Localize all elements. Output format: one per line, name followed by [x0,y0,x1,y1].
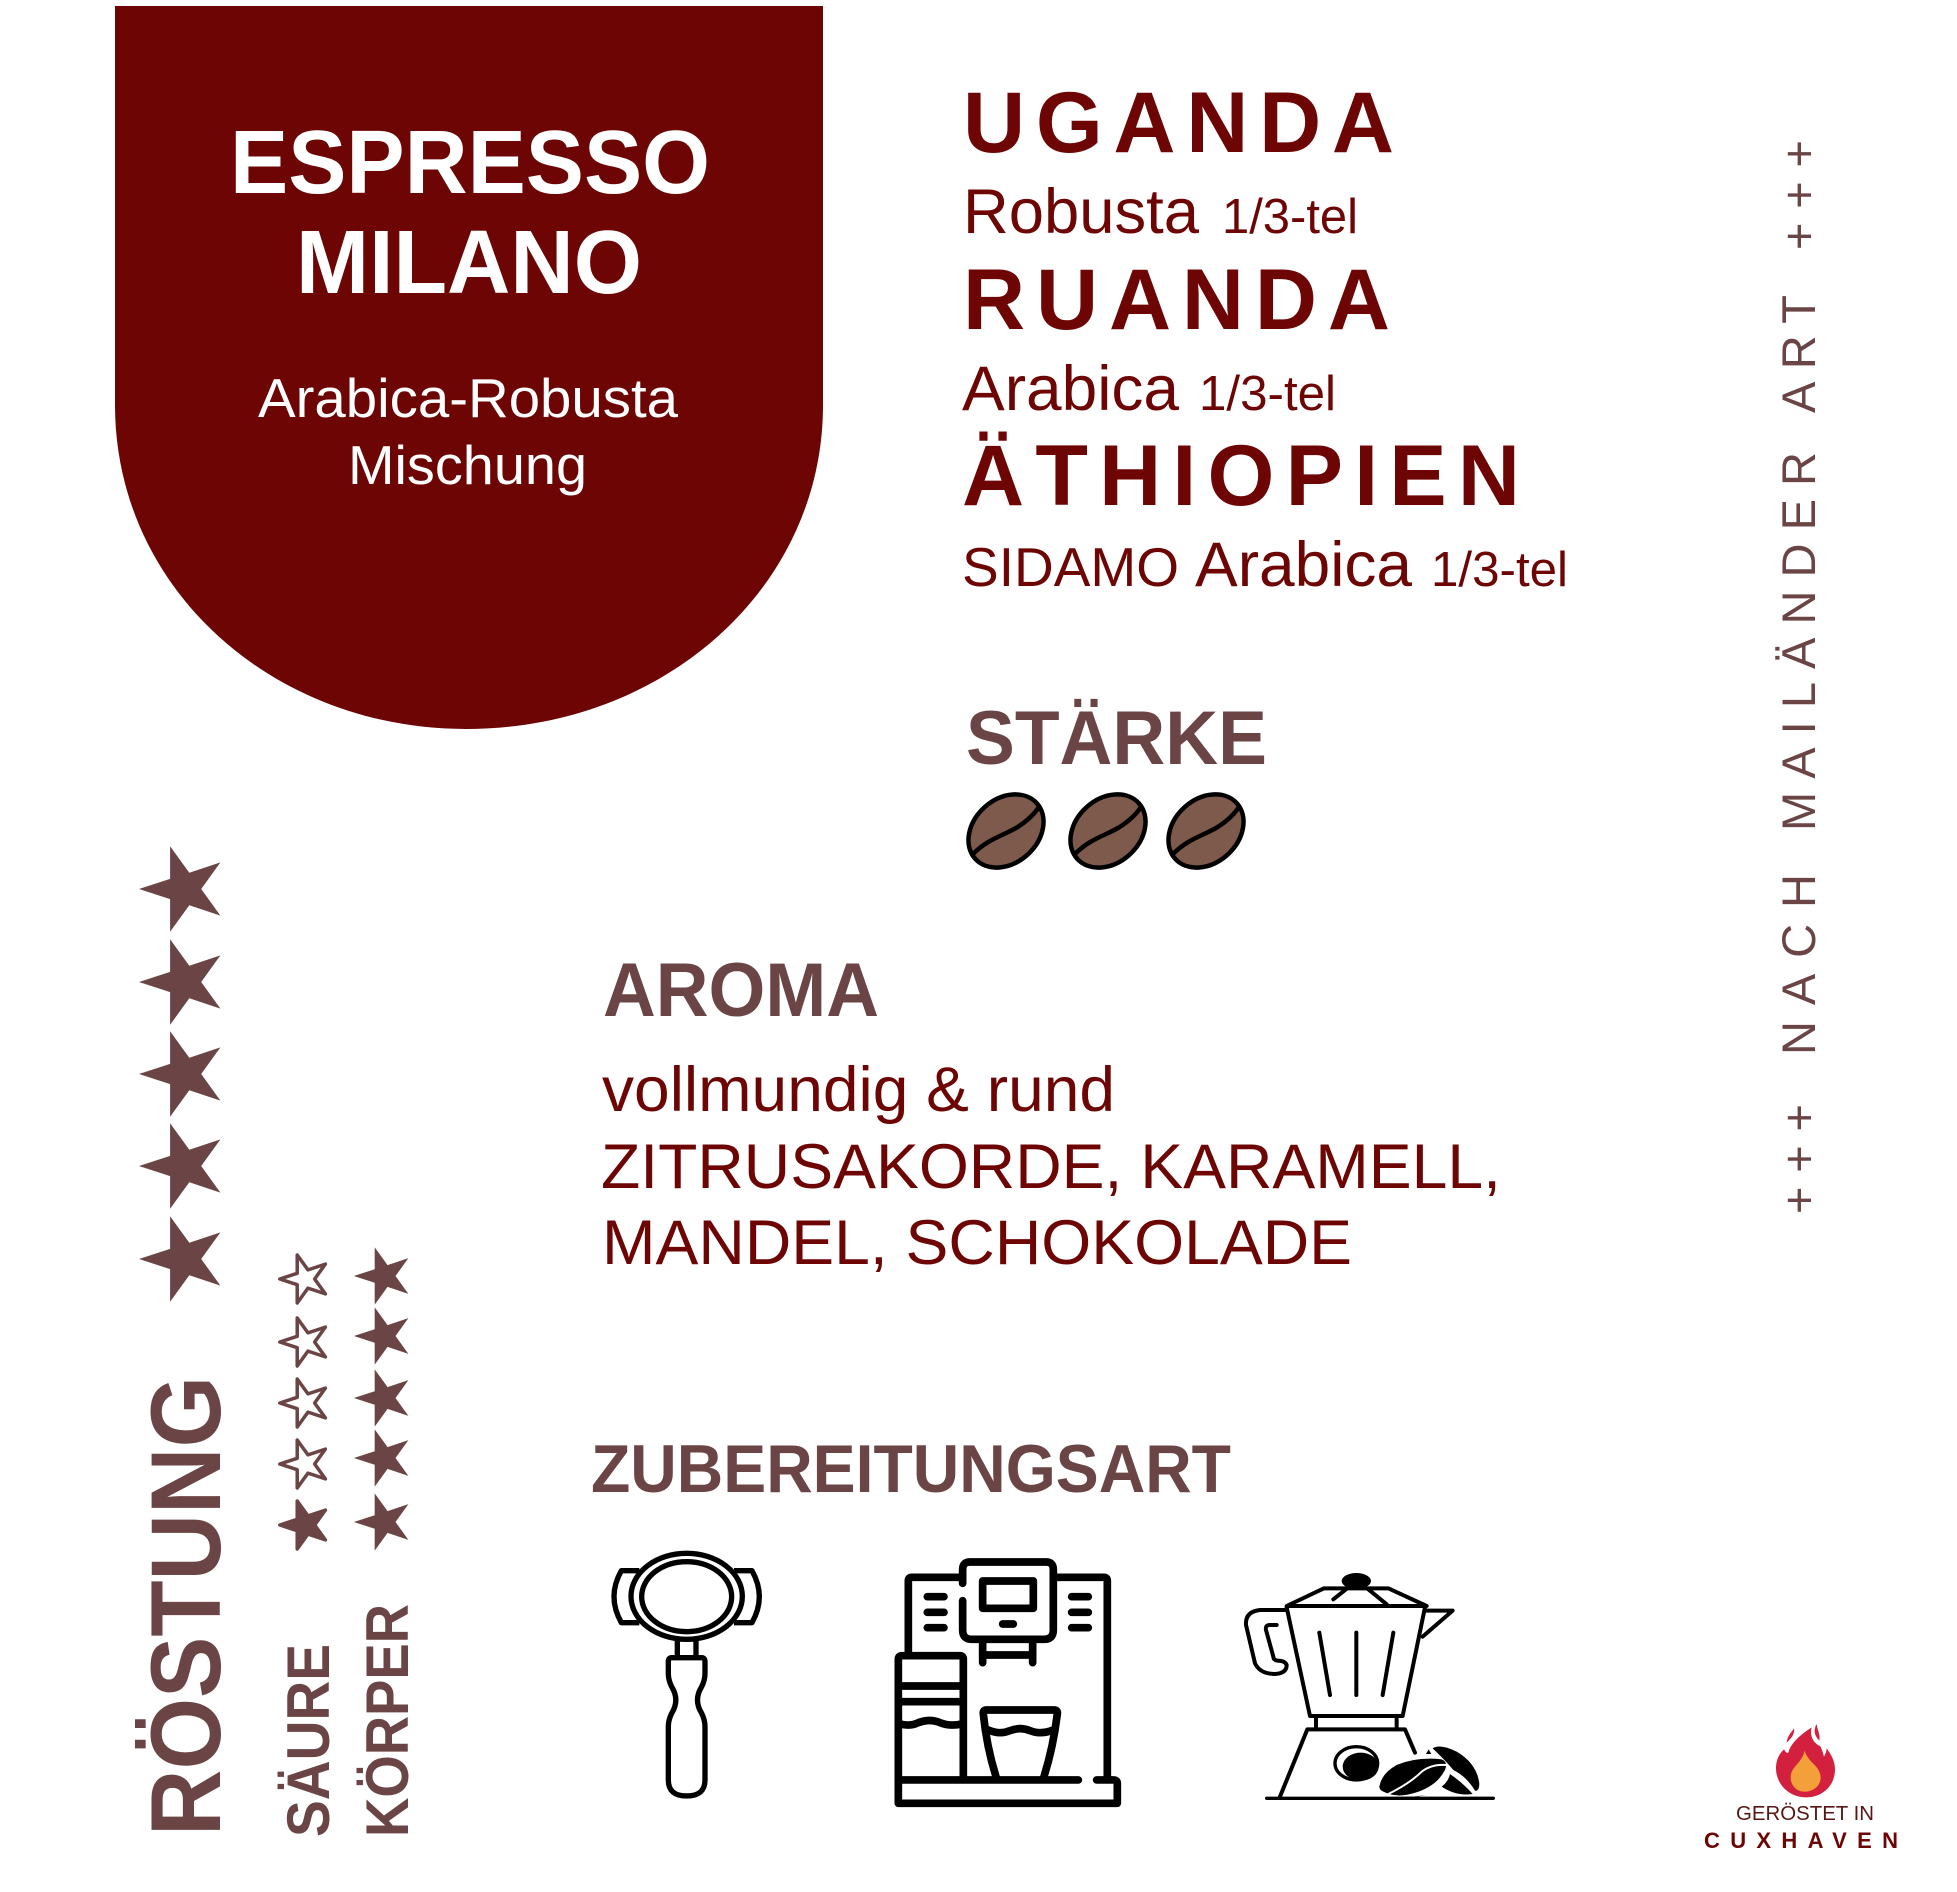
moka knob [1342,1573,1371,1589]
bean 1 [954,779,1058,883]
subtitle: Arabica-Robusta: Arabica-Robusta [258,367,678,429]
icon: flame logo [1776,1724,1835,1797]
origin: Uganda: UGANDA [963,75,1394,171]
side slogan: +++ [1772,140,1825,250]
origin detail: Arabica: Arabica [1195,530,1413,600]
rating: Röstung stars [139,846,220,1302]
origin detail: Arabica: Arabica [962,354,1180,424]
origin detail: Sidamo: SIDAMO [962,536,1179,598]
aroma line 2: ZITRUSAKORDE, KARAMELL, [601,1132,1501,1202]
icons: three coffee beans [954,779,1258,883]
rating: Säure stars [280,1255,325,1549]
icon: portafilter [614,1553,759,1796]
aroma line 1: vollmundig & rund [602,1055,1115,1125]
share: Äthiopien: 1/3-tel [1431,543,1568,597]
rating: Körper stars [354,1247,408,1551]
origin: Äthiopien: ÄTHIOPIEN [962,428,1520,524]
panel: product title shield [115,6,823,729]
side slogan [1772,140,1825,1214]
side slogan: NACH [1772,874,1825,1055]
label: Säure: SÄURE [275,1644,342,1837]
bean 2 [1056,779,1160,883]
heading: Zubereitungsart: ZUBEREITUNGSART [591,1431,1231,1507]
label: Cuxhaven: CUXHAVEN [1704,1828,1898,1853]
label: Geröstet in: GERÖSTET IN [1736,1803,1874,1825]
aroma description [601,1055,1501,1278]
icon: moka pot with beans [1246,1573,1493,1798]
icon: espresso machine [898,1562,1117,1803]
coffee beans [1379,1746,1479,1798]
share: Ruanda: 1/3-tel [1199,367,1336,421]
share: Uganda: 1/3-tel [1222,190,1358,244]
label: Röstung: RÖSTUNG [130,1376,241,1836]
origin detail: Robusta: Robusta [963,177,1200,247]
title: Milano: MILANO [296,213,642,313]
subtitle: Mischung: Mischung [348,434,587,496]
aroma line 3: MANDEL, SCHOKOLADE [602,1208,1352,1278]
heading: Aroma: AROMA [603,948,879,1033]
origin: Ruanda: RUANDA [963,252,1390,348]
heading: Stärke: STÄRKE [966,696,1267,781]
bean 3 [1154,779,1258,883]
side slogan: ART [1772,295,1825,413]
label: Körper: KÖRPER [354,1604,421,1837]
title: Espresso: ESPRESSO [230,113,710,213]
side slogan: MAILÄNDER [1772,452,1825,831]
side slogan: +++ [1772,1104,1825,1214]
origin list [962,75,1568,600]
